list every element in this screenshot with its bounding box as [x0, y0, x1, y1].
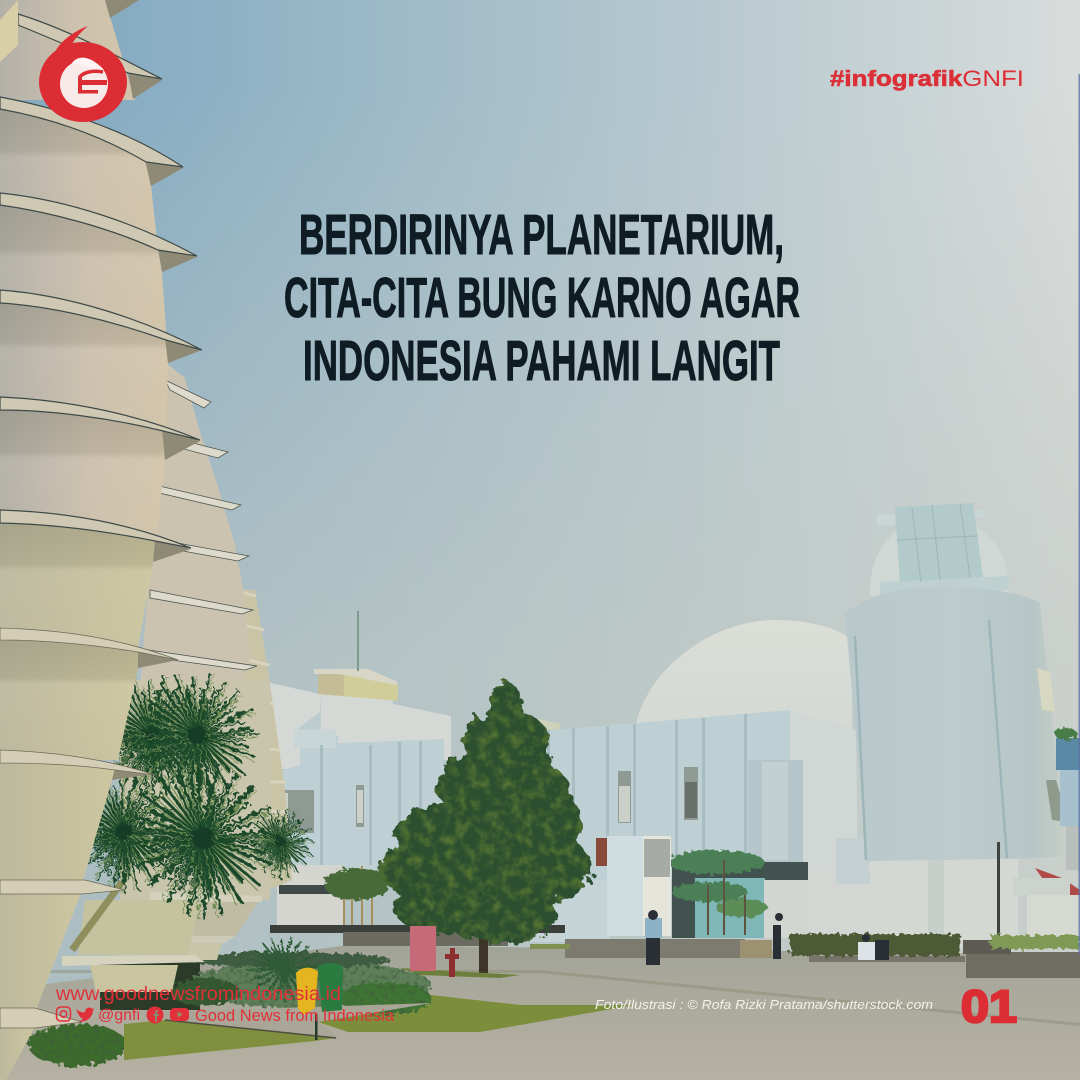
building: white facade	[277, 710, 886, 942]
tower base	[870, 858, 1018, 948]
kerbs, planters and bushes	[0, 925, 1080, 1026]
ground: pavement	[0, 945, 1080, 1080]
grass and shrubs	[28, 952, 635, 1066]
social row	[56, 1006, 395, 1025]
palm trunk	[72, 882, 122, 950]
windows	[279, 767, 698, 833]
logo GNFI	[39, 26, 127, 122]
title: BERDIRINYA PLANETARIUM,	[299, 203, 784, 267]
icon: facebook	[146, 1006, 164, 1024]
background pagoda towers	[120, 362, 292, 900]
facebook page name: Good News from Indonesia	[195, 1006, 395, 1025]
title	[284, 203, 800, 393]
palm trees	[64, 669, 316, 925]
building: planetarium dome	[636, 620, 852, 750]
people	[645, 910, 889, 965]
trash bins	[296, 963, 343, 1040]
blue edge line	[1078, 74, 1080, 954]
tree	[379, 682, 591, 973]
photo credit: Foto/Ilustrasi : © Rofa Rizki Pratama/shutterstock.com	[595, 997, 933, 1012]
tower telescope dome	[870, 503, 1009, 596]
tower wall shadows	[0, 103, 168, 760]
plaque monument	[607, 836, 671, 936]
building: observatory tower	[845, 503, 1069, 948]
tower walls	[0, 0, 168, 545]
small cycad	[247, 937, 321, 1002]
tower cylinder	[845, 587, 1066, 861]
background bamboo and small trees	[324, 850, 768, 935]
front pagoda tower	[0, 0, 202, 1080]
website url: www.goodnewsfromindonesia.id	[55, 984, 341, 1005]
nearby buildings at the right edge	[1013, 728, 1080, 945]
lower pots of background tower	[62, 892, 262, 992]
tower eaves	[105, 0, 202, 780]
title: INDONESIA PAHAMI LANGIT	[303, 329, 780, 393]
icon: twitter	[76, 1008, 94, 1021]
building: rear wing with penthouse	[266, 611, 560, 770]
icon: instagram	[56, 1007, 70, 1021]
pink utility box	[410, 926, 436, 971]
icon: youtube	[170, 1008, 189, 1021]
hashtag label: #infografik GNFI	[830, 66, 1024, 91]
page number: 01	[961, 981, 1017, 1032]
handle: @gnfi	[98, 1007, 140, 1024]
facade lower band	[277, 865, 343, 927]
fire hydrant	[445, 948, 459, 977]
facade column shading	[320, 714, 747, 865]
